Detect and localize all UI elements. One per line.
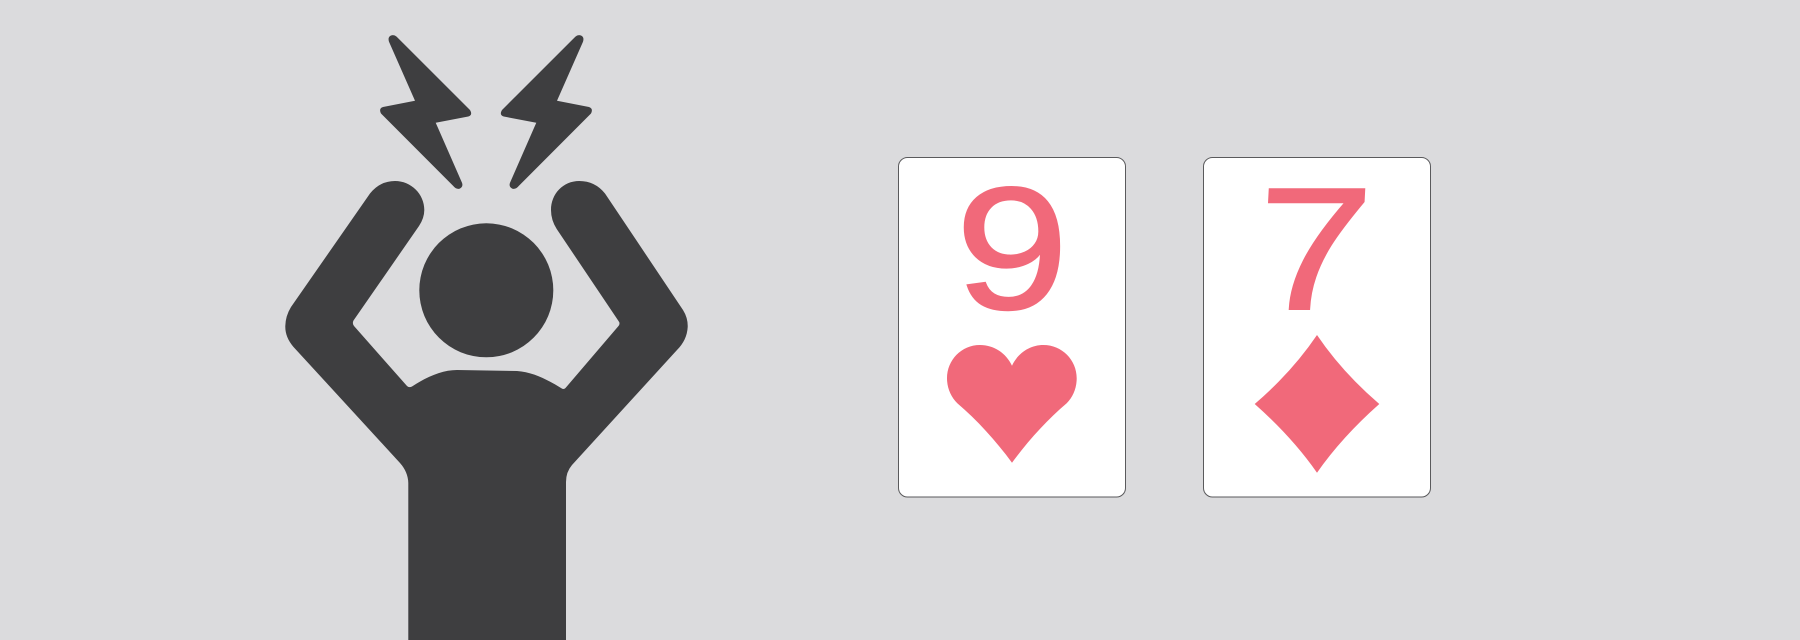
icon: heart <box>947 345 1077 463</box>
icon: frustrated person <box>285 35 688 640</box>
icon: body with raised arms <box>285 181 688 640</box>
icon: left lightning bolt <box>380 35 471 189</box>
card outline <box>898 158 1126 497</box>
panel: seven of diamonds card <box>1204 152 1430 497</box>
icon: diamond <box>1255 335 1379 473</box>
icon: right lightning bolt <box>501 35 592 189</box>
panel: nine of hearts card <box>898 152 1126 497</box>
text: number 7: 7 <box>1251 152 1376 346</box>
text: number 9: 9 <box>955 152 1069 346</box>
card outline <box>1204 158 1430 497</box>
icon: head <box>419 223 553 357</box>
